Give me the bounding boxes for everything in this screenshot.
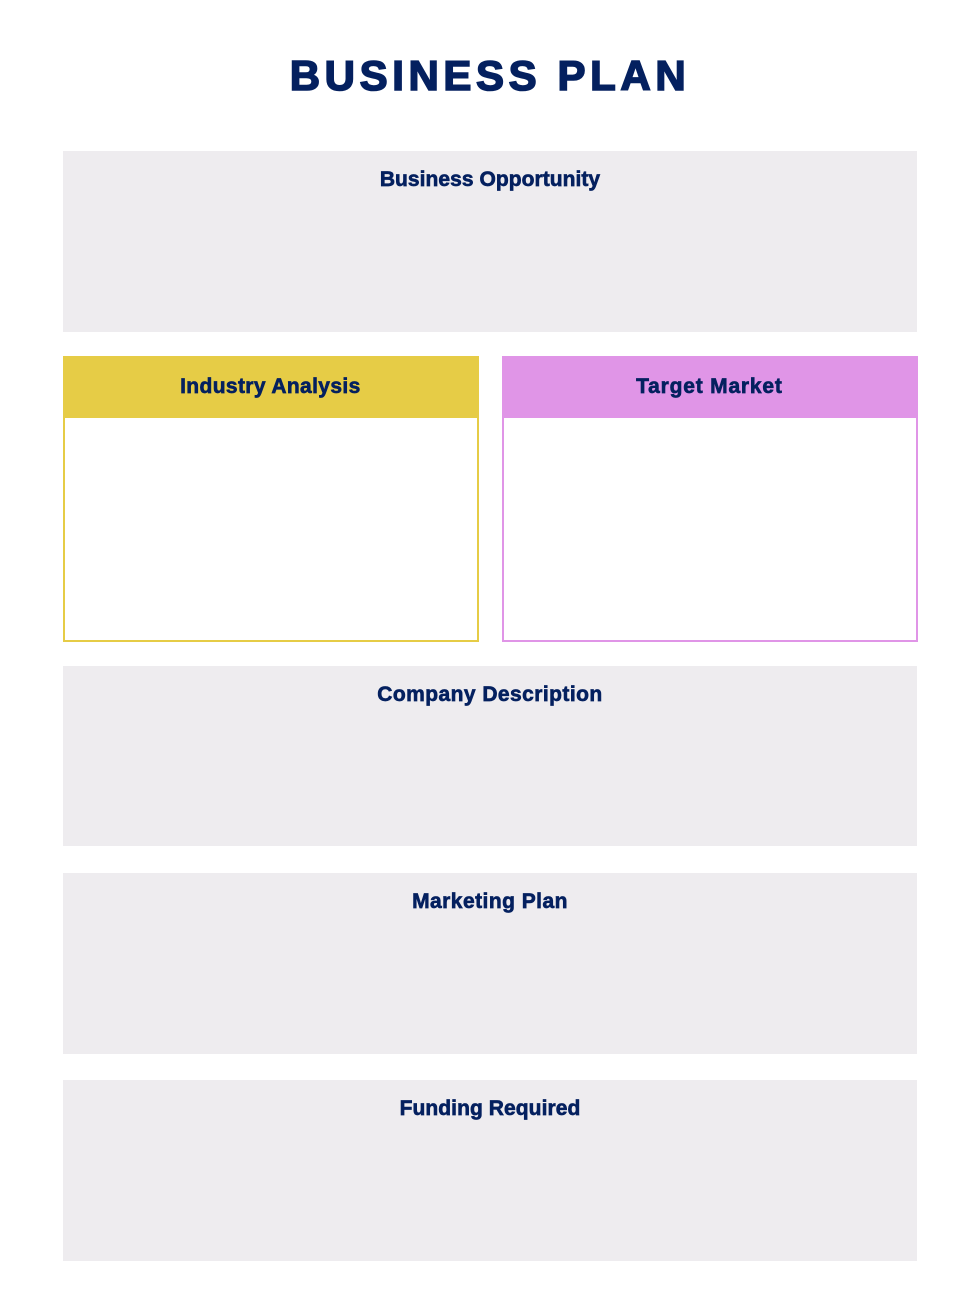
heading: funding required: Funding Required — [400, 1097, 580, 1120]
panel: funding required — [63, 1080, 917, 1261]
panel: industry analysis — [63, 356, 479, 642]
heading: company description: Company Description — [377, 683, 603, 706]
heading: business opportunity: Business Opportunity — [380, 168, 600, 191]
panel: business opportunity — [63, 151, 917, 332]
panel: marketing plan — [63, 873, 917, 1054]
title: BUSINESS PLAN — [290, 52, 690, 99]
heading: marketing plan: Marketing Plan — [412, 890, 568, 913]
panel: company description — [63, 666, 917, 846]
heading: industry analysis: Industry Analysis — [180, 375, 361, 398]
heading: target market — [502, 356, 917, 418]
heading: target market: Target Market — [636, 375, 783, 398]
panel: target market — [502, 356, 918, 642]
heading: industry analysis — [63, 356, 478, 418]
